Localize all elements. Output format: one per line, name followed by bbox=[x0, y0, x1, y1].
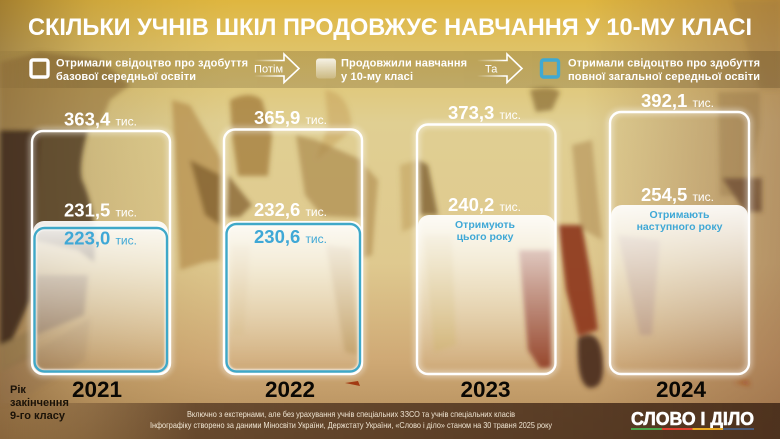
arrow: then: Потім bbox=[254, 64, 283, 76]
panel: 2024: Отримають bbox=[650, 209, 710, 221]
hair and bags bbox=[230, 95, 272, 176]
panel: 2022: 230,6 тис. bbox=[254, 226, 327, 247]
title: СКІЛЬКИ УЧНІВ ШКІЛ ПРОДОВЖУЄ НАВЧАННЯ У 10-МУ КЛАСІ bbox=[28, 14, 752, 41]
legend: continued to grade 10: у 10-му класі bbox=[341, 71, 413, 83]
panel: 2024: 254,5 тис. bbox=[641, 184, 714, 205]
building with windows bbox=[718, 92, 760, 210]
legend: continued to grade 10: Продовжили навчання bbox=[341, 58, 467, 70]
legend: certificate of complete education bbox=[542, 58, 760, 83]
arrow: then bbox=[254, 54, 299, 82]
pale legs bbox=[424, 235, 456, 352]
axis label: Рік bbox=[10, 384, 26, 396]
arrow: and bbox=[477, 54, 522, 82]
axis label: 9-го класу bbox=[10, 410, 66, 422]
logo: СЛОВО І ДІЛО bbox=[631, 409, 754, 429]
legend: continued to grade 10 bbox=[316, 58, 467, 83]
panel: 2022: 365,9 тис. bbox=[254, 107, 327, 128]
panel: 2024: 2024 bbox=[656, 377, 707, 402]
foliage top left bbox=[0, 52, 130, 130]
source note: Включно з екстернами, але без урахування учнів спеціальних ЗЗСО та учнів спеціальних класів bbox=[187, 410, 515, 419]
legend: certificate of basic education: базової середньої освіти bbox=[56, 71, 196, 83]
panel: 2022 bbox=[224, 107, 362, 402]
axis label bbox=[10, 384, 69, 422]
panel: 2022: 2022 bbox=[265, 377, 315, 402]
tan lower left bbox=[0, 318, 90, 405]
panel: 2024: наступного року bbox=[637, 221, 723, 233]
source note bbox=[150, 410, 553, 430]
foliage between first two panels bbox=[172, 100, 222, 270]
panel: 2023: 2023 bbox=[460, 377, 511, 402]
legend: certificate of basic education: Отримали свідоцтво про здобуття bbox=[56, 58, 248, 70]
panel: 2023 bbox=[417, 102, 556, 402]
students at centre-right bbox=[418, 160, 438, 215]
legend: certificate of complete education: Отримали свідоцтво про здобуття bbox=[568, 58, 760, 70]
legend: certificate of complete education: повної загальної середньої освіти bbox=[568, 71, 760, 83]
panel: 2024 bbox=[610, 90, 749, 402]
panel: 2023: 373,3 тис. bbox=[448, 102, 521, 123]
panel: 2023: 240,2 тис. bbox=[448, 194, 521, 215]
footer band bbox=[0, 403, 780, 439]
dark bush left bbox=[0, 130, 40, 345]
axis label: закінчення bbox=[10, 397, 69, 409]
panel: 2024: 392,1 тис. bbox=[641, 90, 714, 111]
panel: 2023: Отримують bbox=[455, 219, 516, 231]
arrow: and: Та bbox=[485, 64, 498, 76]
panel: 2021: 231,5 тис. bbox=[64, 200, 137, 220]
panel: 2021: 2021 bbox=[72, 377, 122, 402]
source note: Інфографіку створено за даними Міносвіти України, Держстату України, «Слово і діло» станом на 30 травня 2025 року bbox=[150, 421, 553, 430]
red legs bbox=[558, 225, 598, 336]
legend: certificate of basic education bbox=[31, 58, 248, 83]
panel: 2022: 232,6 тис. bbox=[254, 199, 327, 220]
panel: 2021: 223,0 тис. bbox=[64, 228, 137, 248]
shoe bbox=[578, 335, 603, 388]
legend band bbox=[0, 51, 780, 88]
panel: 2023: цього року bbox=[457, 231, 514, 243]
panel: 2021: 363,4 тис. bbox=[64, 108, 137, 130]
panel: 2021 bbox=[32, 108, 170, 402]
